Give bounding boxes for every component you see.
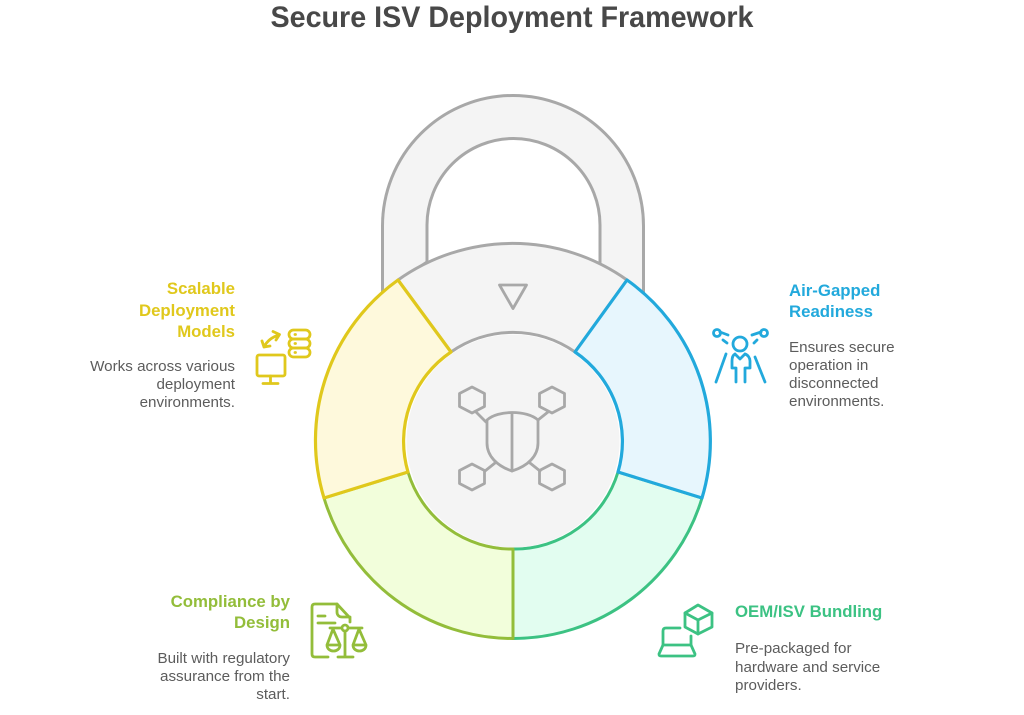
callout: OEM/ISV Bundling — [659, 602, 882, 694]
icon: triangle — [500, 285, 526, 308]
heading — [171, 592, 291, 632]
description: hardware and service — [735, 659, 880, 676]
callout: Compliance by Design — [157, 592, 366, 703]
description: disconnected — [789, 375, 879, 392]
heading: Design — [234, 613, 290, 632]
description: Built with regulatory — [157, 650, 290, 667]
description: deployment — [156, 376, 236, 393]
heading: Readiness — [789, 302, 873, 321]
segment: Scalable Deployment Models — [315, 280, 451, 498]
heading: Air-Gapped — [789, 281, 880, 300]
description — [157, 650, 290, 703]
title: Secure ISV Deployment Framework — [270, 1, 754, 34]
description: Ensures secure — [789, 339, 895, 356]
icon: laptop and cube — [659, 605, 712, 656]
heading — [789, 281, 880, 321]
description — [90, 358, 236, 411]
lock top segment — [398, 243, 627, 352]
callout: Scalable Deployment Models — [90, 279, 310, 411]
icon: monitor and database — [257, 330, 310, 384]
heading: Models — [177, 322, 235, 341]
description: start. — [256, 686, 290, 703]
callout: Air-Gapped Readiness — [714, 281, 895, 410]
center hub — [406, 334, 620, 548]
description: environments. — [140, 394, 235, 411]
lock shackle — [382, 95, 644, 292]
description: operation in — [789, 357, 868, 374]
icon: document and scales — [312, 604, 366, 657]
description: Works across various — [90, 358, 235, 375]
description: environments. — [789, 393, 884, 410]
heading — [139, 279, 235, 341]
icon: person with drones — [714, 330, 768, 382]
description: Pre-packaged for — [735, 640, 852, 657]
description — [735, 640, 880, 694]
segment: Compliance by Design — [324, 472, 513, 638]
heading: Compliance by — [171, 592, 291, 611]
description: providers. — [735, 677, 802, 694]
padlock diagram — [315, 95, 710, 638]
segment: Air-Gapped Readiness — [575, 280, 710, 498]
heading: Scalable — [167, 279, 235, 298]
heading: OEM/ISV Bundling — [735, 602, 882, 621]
segment: OEM/ISV Bundling — [513, 472, 702, 638]
icon: shield network — [460, 387, 564, 490]
description — [789, 339, 895, 410]
description: assurance from the — [160, 668, 290, 685]
heading: Deployment — [139, 301, 235, 320]
